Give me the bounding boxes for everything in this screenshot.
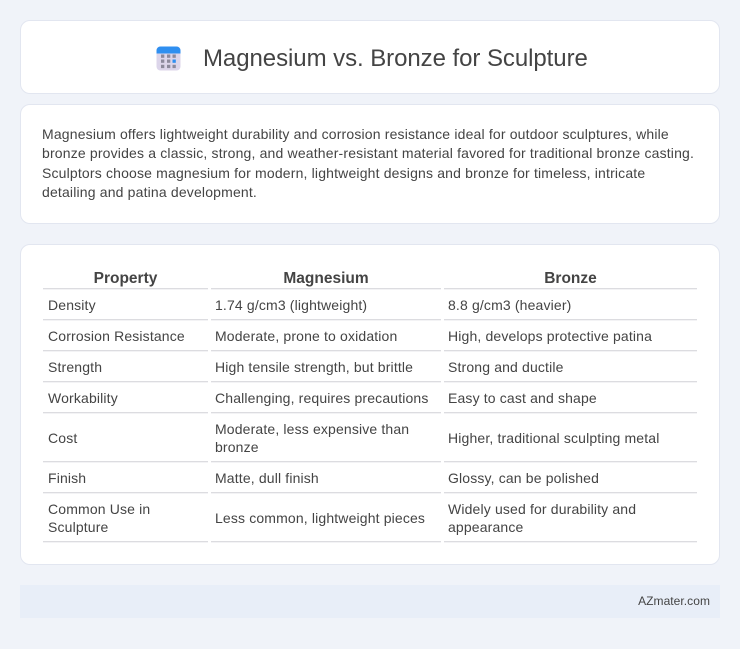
row: Strength: Strength xyxy=(48,359,102,375)
row: Common Use in Sculpture: Sculpture xyxy=(48,519,108,535)
icon: calendar xyxy=(156,46,180,70)
comparison table: Challenging, requires precautions xyxy=(215,390,429,406)
footer source text: AZmater.com xyxy=(638,594,710,608)
comparison table: Glossy, can be polished xyxy=(448,470,599,486)
comparison table: bronze xyxy=(215,439,259,455)
row: Cost: Cost xyxy=(48,430,77,446)
comparison table: Widely used for durability and xyxy=(448,501,636,517)
intro paragraph: Sculptors choose magnesium for modern, lightweight designs and bronze for timeless, intricate xyxy=(42,165,645,181)
row: Finish: Finish xyxy=(48,470,86,486)
intro paragraph xyxy=(42,126,694,200)
row: Corrosion Resistance: Corrosion Resistance xyxy=(48,328,185,344)
comparison table: Moderate, less expensive than xyxy=(215,421,409,437)
comparison table: Moderate, prone to oxidation xyxy=(215,328,397,344)
comparison table: Easy to cast and shape xyxy=(448,390,597,406)
row: Common Use in Sculpture xyxy=(48,501,150,535)
intro paragraph: Magnesium offers lightweight durability and corrosion resistance ideal for outdoor sculptures, while xyxy=(42,126,669,142)
intro paragraph: bronze provides a classic, strong, and weather-resistant material favored for traditional bronze casting. xyxy=(42,145,694,161)
footer bar xyxy=(20,585,720,618)
header: Bronze: Bronze xyxy=(544,270,597,287)
comparison table: 1.74 g/cm3 (lightweight) xyxy=(215,297,367,313)
comparison table card xyxy=(20,244,720,565)
row: Common Use in Sculpture: Common Use in xyxy=(48,501,150,517)
row: Workability: Workability xyxy=(48,390,118,406)
intro text card xyxy=(20,104,720,224)
header: Property: Property xyxy=(94,270,157,287)
comparison table: High, develops protective patina xyxy=(448,328,652,344)
title: Magnesium vs. Bronze for Sculpture xyxy=(203,45,588,72)
comparison table: Matte, dull finish xyxy=(215,470,319,486)
comparison table: 8.8 g/cm3 (heavier) xyxy=(448,297,571,313)
header: Magnesium: Magnesium xyxy=(283,270,369,287)
comparison table: High tensile strength, but brittle xyxy=(215,359,413,375)
row: Density: Density xyxy=(48,297,96,313)
title card xyxy=(20,20,720,94)
comparison table: appearance xyxy=(448,519,523,535)
comparison table: Less common, lightweight pieces xyxy=(215,510,425,526)
intro paragraph: detailing and patina development. xyxy=(42,184,257,200)
comparison table: Strong and ductile xyxy=(448,359,564,375)
comparison table: Higher, traditional sculpting metal xyxy=(448,430,659,446)
